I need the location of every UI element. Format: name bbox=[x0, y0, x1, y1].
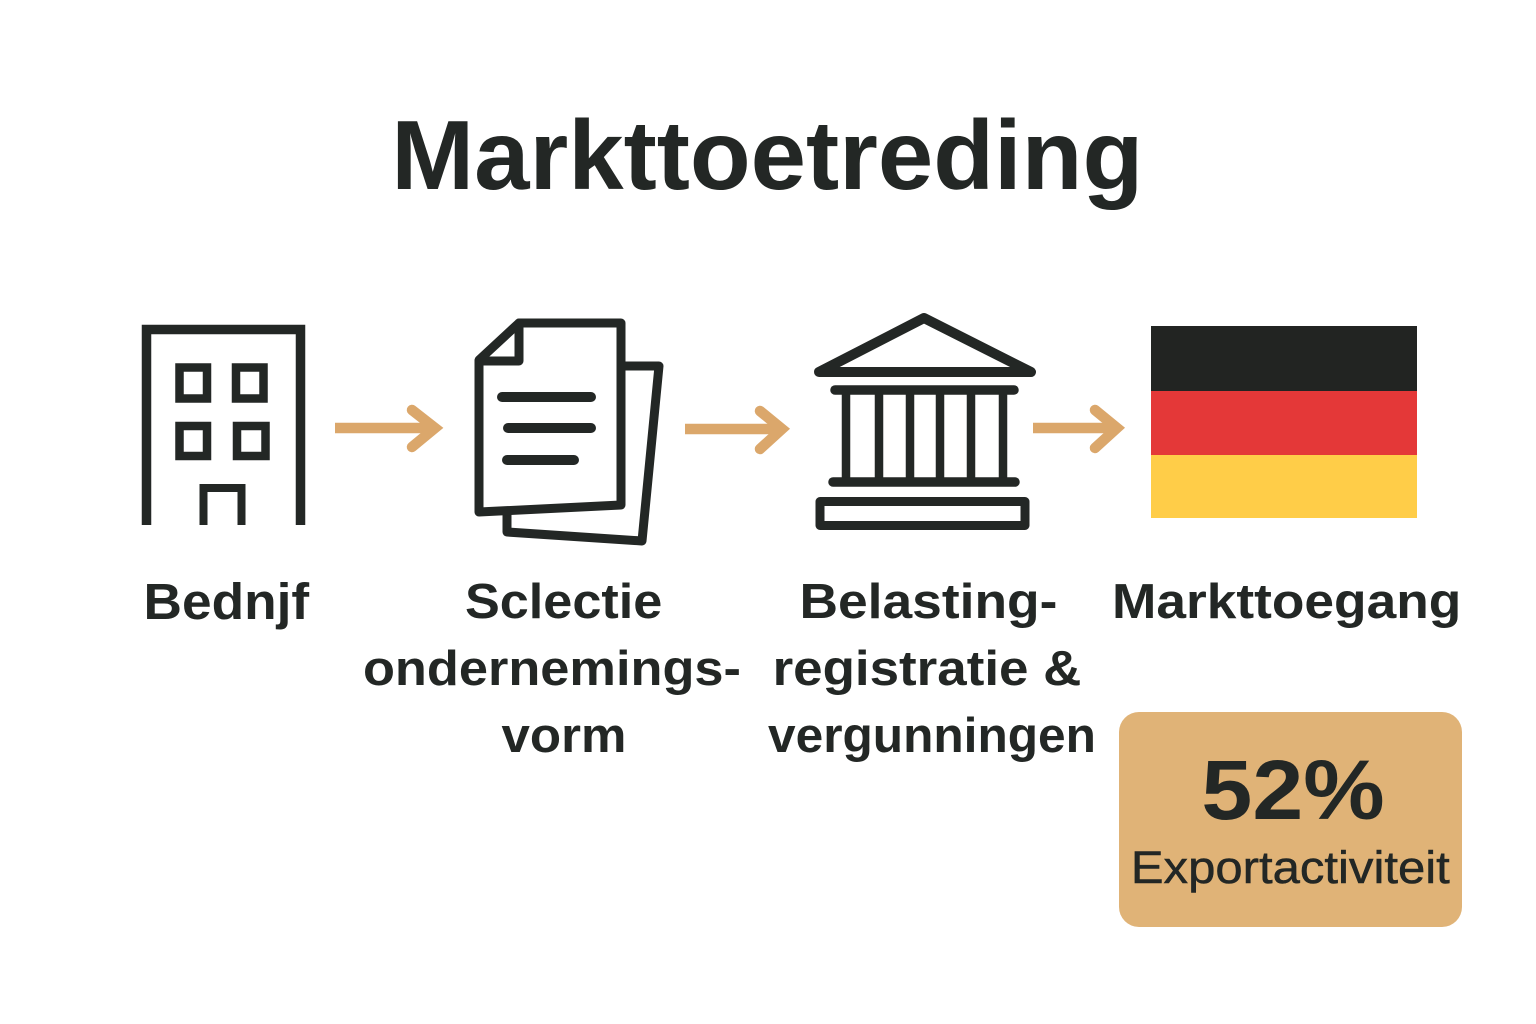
label: Markttoegang: Markttoegang bbox=[1112, 575, 1462, 629]
callout: export activity bbox=[1119, 712, 1462, 927]
label: Selectie ondernemingsvorm: Sclectie bbox=[465, 575, 663, 629]
label: Belasting-registratie en vergunningen: vergunningen bbox=[768, 709, 1096, 763]
label: Selectie ondernemingsvorm bbox=[363, 575, 741, 763]
label: Selectie ondernemingsvorm: ondernemings- bbox=[363, 642, 741, 696]
arrow: building to documents bbox=[335, 410, 435, 447]
label: Belasting-registratie en vergunningen: registratie & bbox=[772, 642, 1081, 696]
icon: office building bbox=[146, 330, 300, 525]
icon: documents bbox=[479, 323, 659, 541]
callout label: Exportactiviteit bbox=[1131, 842, 1450, 893]
callout value: 52% bbox=[1202, 743, 1385, 837]
icon: German flag bbox=[1151, 326, 1417, 518]
arrow: institution to market bbox=[1033, 410, 1117, 448]
label: Belasting-registratie en vergunningen bbox=[768, 575, 1096, 763]
title: Markttoetreding bbox=[391, 100, 1143, 210]
label: Belasting-registratie en vergunningen: Belasting- bbox=[799, 575, 1057, 629]
arrow: documents to institution bbox=[685, 411, 782, 449]
label: Bedrijf: Bednjf bbox=[143, 573, 309, 630]
label: Selectie ondernemingsvorm: vorm bbox=[502, 709, 626, 763]
icon: government building bbox=[819, 318, 1031, 526]
